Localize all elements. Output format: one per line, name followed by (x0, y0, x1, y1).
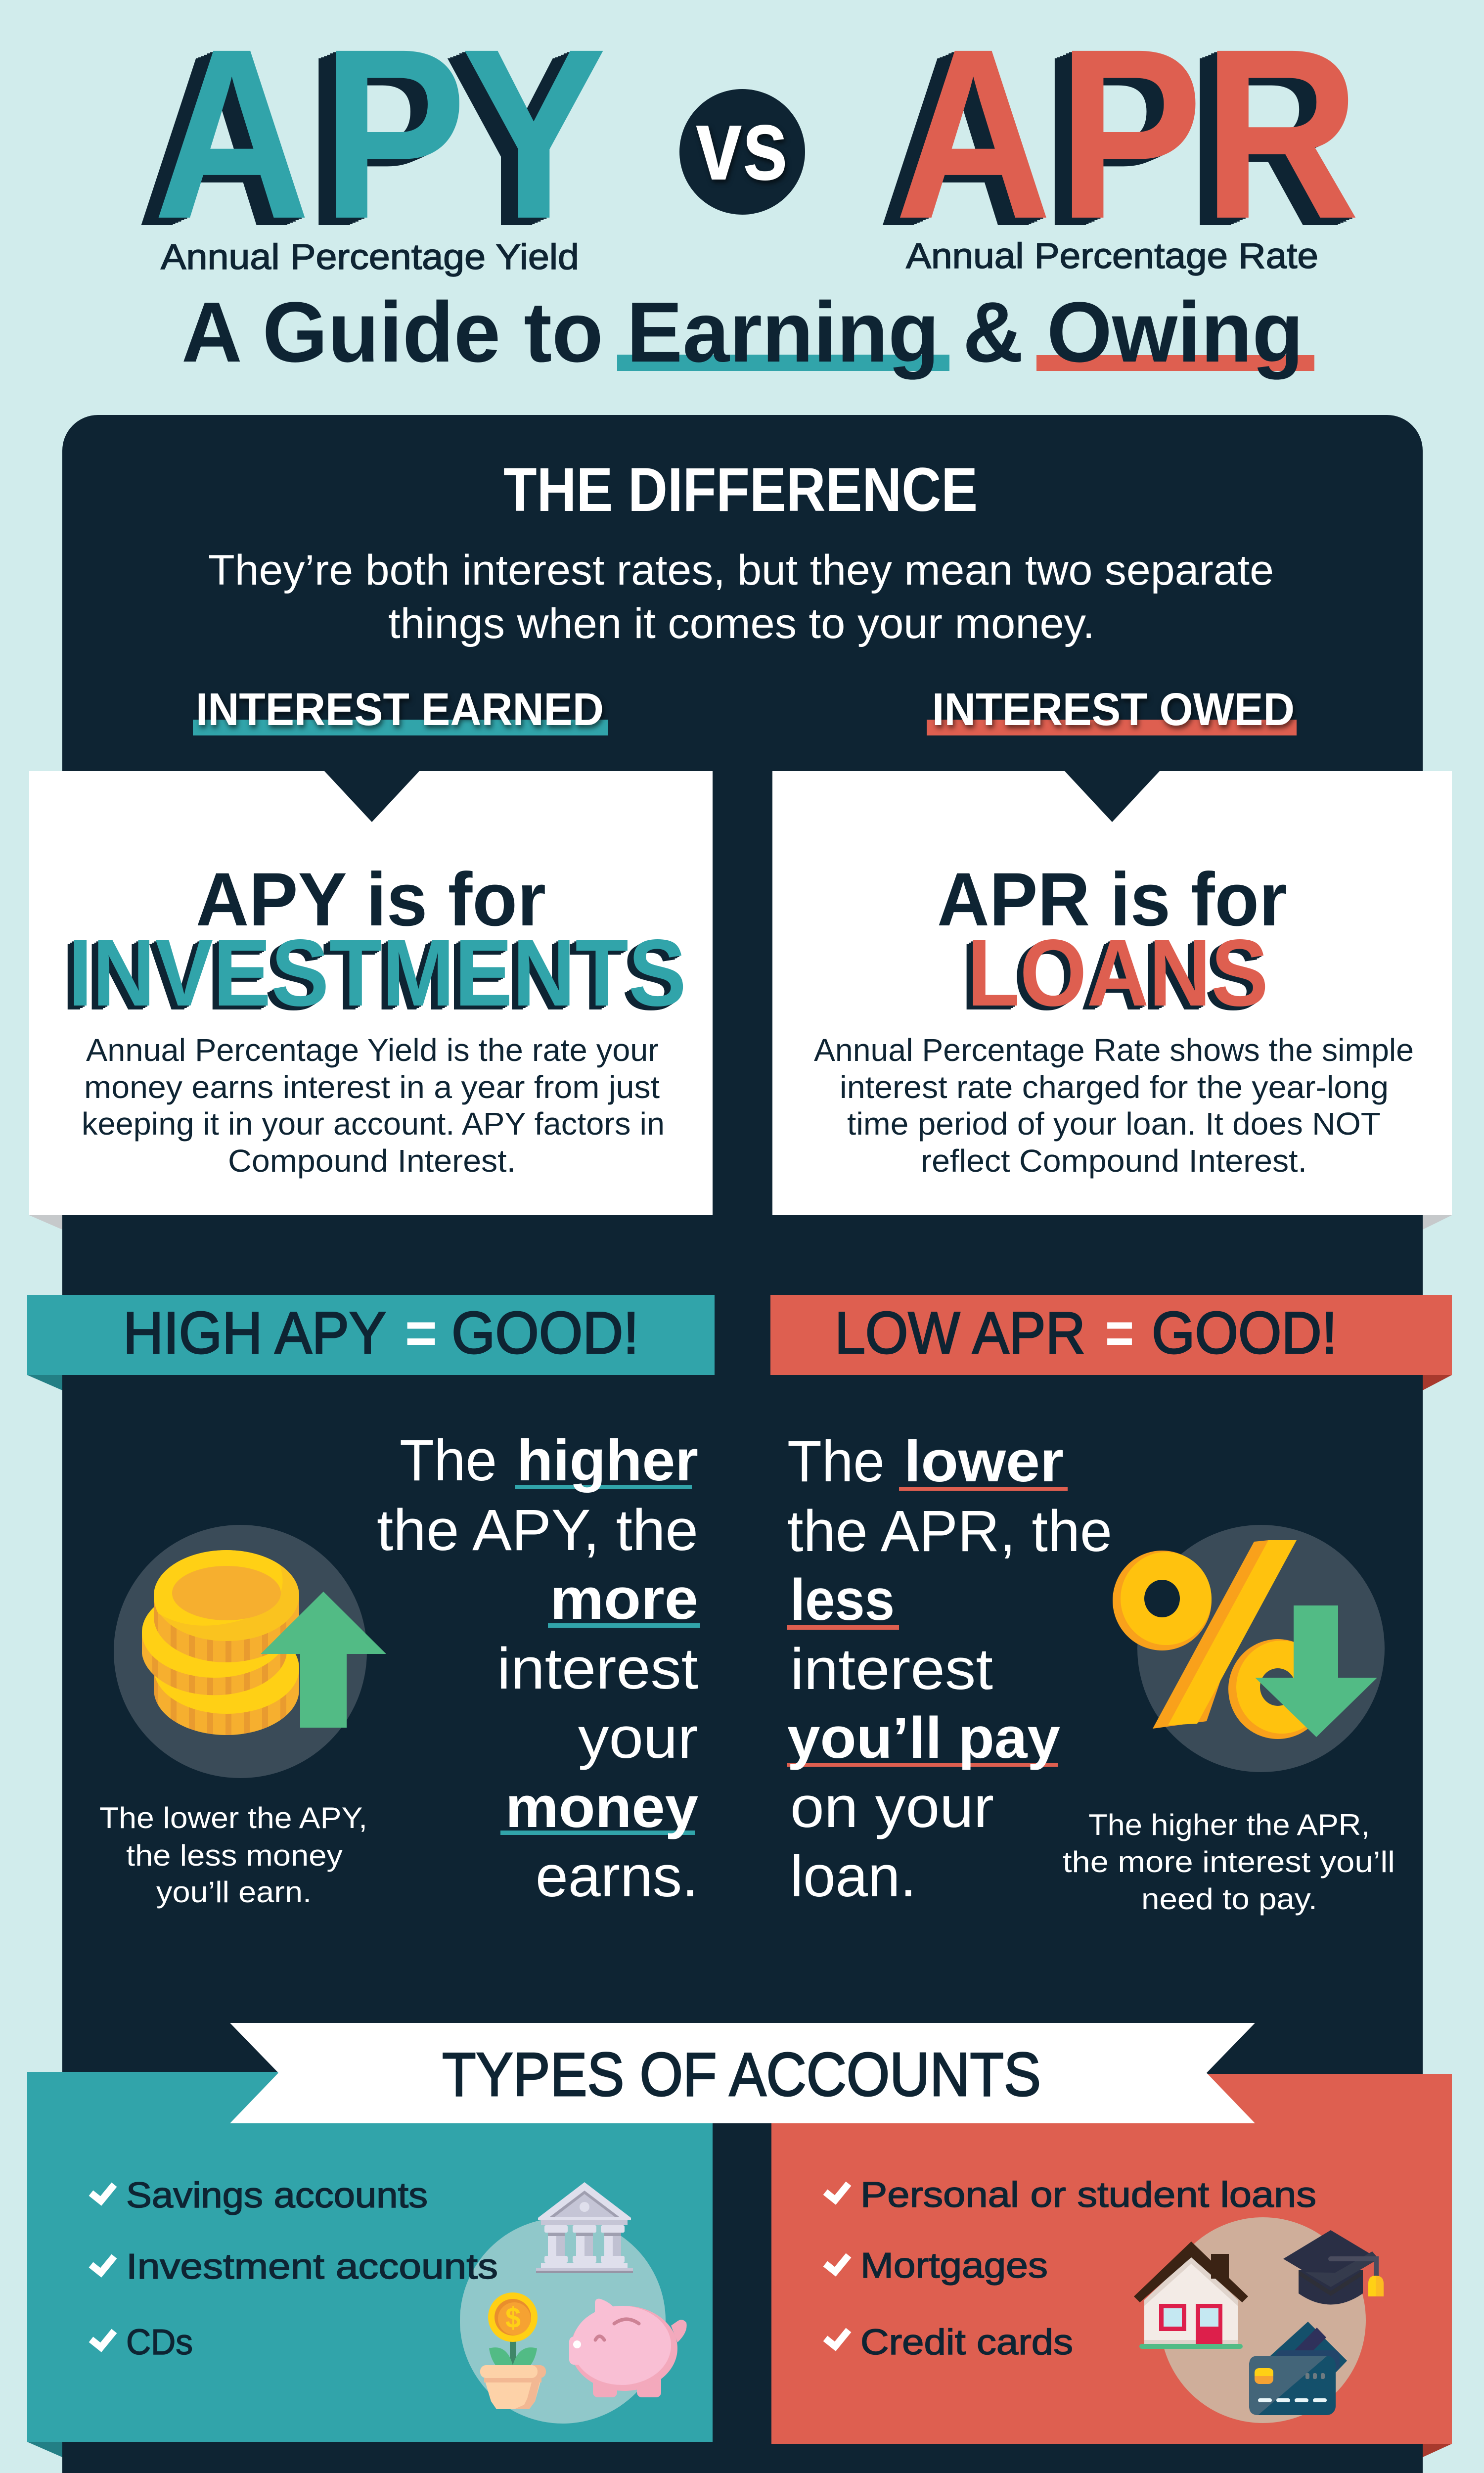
text: the higher the APY (377, 1428, 700, 1909)
icon: bank, plant and piggy bank (460, 2182, 687, 2424)
checklist: account types: Savings accounts (126, 2176, 428, 2215)
text: APY description: money earns interest in a year from just (84, 1069, 660, 1105)
subheading: Annual Percentage Yield: Annual Percentage Yield (161, 237, 579, 277)
text: the higher the APY: interest (497, 1636, 698, 1701)
text: the higher the APY: The (400, 1428, 497, 1493)
text: APY description: Annual Percentage Yield is the rate your (86, 1032, 659, 1068)
checklist: account types (91, 2176, 498, 2362)
text: the lower the APR (787, 1429, 1112, 1909)
checklist: loan types: Credit cards (860, 2323, 1073, 2362)
text: the higher the APY: earns. (536, 1844, 698, 1909)
subtitle: A Guide to Earning & Owing: A Guide to Earning & Owing (181, 284, 1304, 380)
icon: house, graduation cap and credit card (1134, 2217, 1384, 2423)
text: APR description (814, 1032, 1414, 1179)
text: APY description: keeping it in your account. APY factors in (82, 1106, 665, 1142)
banner: low APR = good: LOW APR (835, 1300, 1085, 1366)
checklist: loan types: Personal or student loans (860, 2175, 1316, 2215)
banner: high APY = good: GOOD! (451, 1300, 639, 1366)
banner: high APY = good (27, 1295, 715, 1390)
panel: APY card (29, 771, 713, 1230)
checklist: loan types (825, 2175, 1316, 2362)
text: the lower the APR: the APR, the (787, 1499, 1112, 1564)
text: the lower the APR: on your (790, 1775, 994, 1840)
intro text (208, 547, 1274, 647)
text: the higher the APY: your (578, 1705, 698, 1771)
text: APR description: time period of your loan. It does NOT (847, 1106, 1381, 1142)
checklist: account types: Investment accounts (126, 2247, 498, 2287)
caption: the lower the APY (99, 1801, 367, 1909)
banner: low APR = good (770, 1295, 1452, 1390)
text: the higher the APY: money (505, 1775, 698, 1840)
panel: APR card (772, 771, 1452, 1230)
label: interest owed: INTEREST OWED (932, 684, 1295, 735)
heading: APY is for: APY is for (196, 857, 546, 942)
checklist: account types: CDs (126, 2323, 193, 2362)
icon: coins with up arrow (114, 1525, 386, 1778)
panel: dark background panel (62, 415, 1423, 2473)
text: the higher the APY: the APY, the (377, 1498, 698, 1563)
heading: APY: APY (153, 0, 607, 269)
text: APY description: Compound Interest. (228, 1143, 516, 1179)
caption: the higher the APR: the more interest you’ll (1063, 1845, 1395, 1878)
text: the lower the APR: The (787, 1429, 885, 1494)
text: the higher the APY: higher (517, 1428, 698, 1493)
text: APY description (82, 1032, 665, 1179)
subheading: Annual Percentage Rate: Annual Percentage Rate (906, 236, 1318, 276)
heading: THE DIFFERENCE: THE DIFFERENCE (503, 456, 978, 524)
banner: high APY = good: = (405, 1300, 437, 1366)
text: APR description: interest rate charged for the year-long (840, 1069, 1389, 1105)
checklist: loan types: Mortgages (860, 2246, 1048, 2286)
text: the lower the APR: interest (790, 1637, 993, 1702)
panel: investment account types (27, 2072, 713, 2457)
intro text: things when it comes to your money. (388, 600, 1095, 647)
section: the difference (193, 456, 1297, 735)
caption: the lower the APY: the less money (126, 1839, 343, 1872)
intro text: They’re both interest rates, but they mean two separate (208, 547, 1274, 594)
panel: loan account types (771, 2074, 1452, 2457)
label: interest earned: INTEREST EARNED (196, 684, 604, 735)
caption: the higher the APR: need to pay. (1141, 1882, 1317, 1916)
text: the lower the APR: you’ll pay (787, 1705, 1060, 1771)
text: the lower the APR: loan. (790, 1844, 916, 1909)
ribbon: types of accounts (230, 2023, 1255, 2123)
ribbon: types of accounts: TYPES OF ACCOUNTS (442, 2041, 1041, 2109)
caption: the lower the APY: you’ll earn. (156, 1876, 312, 1909)
heading: APR is for: APR is for (937, 857, 1287, 942)
banner: high APY = good: HIGH APY (123, 1300, 386, 1366)
heading: APR: APR (895, 0, 1360, 269)
text: the lower the APR: lower (904, 1429, 1064, 1494)
heading: INVESTMENTS: INVESTMENTS (68, 919, 686, 1026)
text: APR description: Annual Percentage Rate shows the simple (814, 1032, 1414, 1068)
badge: vs: vs (696, 88, 788, 201)
caption: the higher the APR (1063, 1808, 1395, 1916)
text: the higher the APY: more (550, 1566, 698, 1632)
text: APR description: reflect Compound Interest. (921, 1143, 1307, 1179)
banner: low APR = good: = (1105, 1300, 1134, 1366)
caption: the lower the APY: The lower the APY, (99, 1801, 367, 1834)
text: the lower the APR: less (790, 1567, 895, 1633)
icon: percent with down arrow (1113, 1525, 1385, 1772)
heading: LOANS: LOANS (967, 919, 1268, 1026)
banner: low APR = good: GOOD! (1152, 1300, 1337, 1366)
icon: bank, plant and piggy bank: $ (505, 2302, 521, 2334)
caption: the higher the APR: The higher the APR, (1088, 1808, 1370, 1841)
title: APY vs APR (153, 0, 1360, 277)
